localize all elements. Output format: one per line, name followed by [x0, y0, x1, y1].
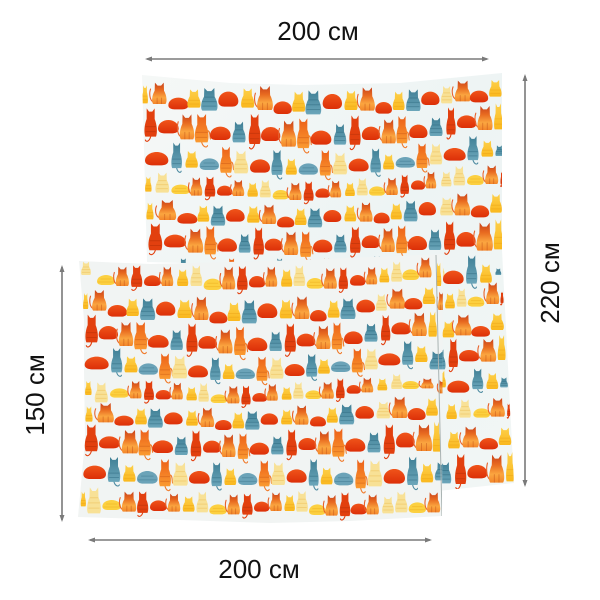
panel: smaller blanket 200x150: [70, 250, 450, 530]
pattern rows: right strip of upper blanket: [434, 255, 514, 489]
arrow: top width: [145, 56, 489, 62]
arrow: left height: [60, 265, 64, 522]
dimension label: bottom width: 200 см: [218, 554, 300, 584]
dimension label: left height: 150 см: [20, 354, 50, 436]
dimension label: right height: 220 см: [535, 242, 565, 324]
pattern rows: upper blanket: [142, 80, 504, 280]
pattern rows: lower blanket lower half: [81, 374, 450, 520]
arrow: right height: [522, 74, 528, 487]
arrow: bottom width: [88, 538, 432, 542]
pattern rows: lower blanket upper half: [81, 257, 446, 385]
dimension label: top width: 200 см: [277, 16, 359, 46]
panel: large blanket 200x220: [142, 73, 514, 490]
fold line: right edge of lower blanket: [436, 255, 442, 516]
